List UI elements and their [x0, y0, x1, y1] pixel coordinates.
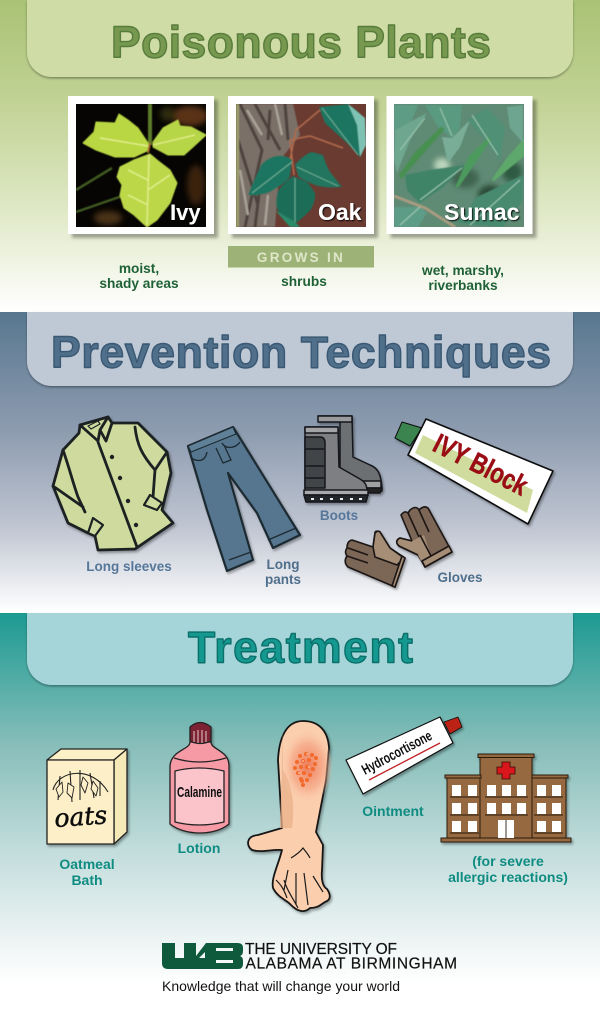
icon: hospital building	[441, 754, 571, 842]
text: IVY Block: IVY Block	[428, 428, 533, 502]
title: Prevention Techniques: Prevention Techniques	[51, 328, 551, 378]
icon: UAB letters	[162, 943, 243, 969]
text: oatmeal bath label: Oatmeal	[59, 856, 115, 872]
panel: poison oak photo	[228, 96, 374, 234]
icon: rubber boots	[304, 416, 382, 502]
icon: oats box	[47, 749, 127, 844]
banner: grows in	[228, 246, 374, 268]
label: Oak: Oak	[318, 199, 362, 225]
text: Hydrocortisone: Hydrocortisone	[359, 728, 435, 778]
text: gloves label: Gloves	[437, 570, 483, 585]
icon: hydrocortisone tube	[346, 717, 462, 794]
panel: poison ivy photo	[68, 96, 214, 234]
background: prevention section	[0, 312, 600, 612]
icon: gloves	[345, 507, 452, 587]
text: long sleeves label: Long sleeves	[86, 559, 172, 574]
icon: ivy block tube	[395, 419, 553, 524]
text: university name: ALABAMA AT BIRMINGHAM	[246, 956, 457, 972]
text: lotion label: Lotion	[178, 840, 220, 856]
title: Treatment: Treatment	[188, 624, 413, 672]
title: Poisonous Plants: Poisonous Plants	[111, 18, 491, 68]
panel: prevention heading	[27, 312, 573, 386]
text: Calamine: Calamine	[177, 784, 222, 800]
label: Ivy: Ivy	[170, 200, 201, 225]
text: ointment label: Ointment	[362, 803, 424, 819]
panel: treatment heading	[27, 613, 573, 685]
text: sumac habitat: wet, marshy,	[421, 263, 504, 278]
background: treatment section	[0, 613, 600, 985]
label: Sumac: Sumac	[444, 199, 520, 225]
text: university name: THE UNIVERSITY OF	[245, 941, 397, 958]
panel: poisonous plants heading	[27, 0, 573, 77]
text: boots label: Boots	[320, 508, 358, 523]
logo: UAB	[162, 941, 457, 994]
text: oatmeal bath label: Bath	[71, 872, 103, 888]
icon: long pants	[188, 427, 300, 571]
text: sumac habitat: riverbanks	[428, 278, 498, 293]
text: long pants label: Long	[266, 557, 300, 572]
text: severe allergic reactions label: allergic reactions)	[448, 869, 568, 885]
icon: arm with rash	[248, 721, 332, 911]
banner: grows in: GROWS IN	[257, 250, 345, 265]
text: severe allergic reactions label: (for severe	[472, 853, 544, 869]
text: oats: oats	[53, 800, 108, 833]
text: oak habitat: shrubs	[281, 274, 327, 289]
icon: calamine lotion bottle	[170, 722, 229, 833]
text: ivy habitat: moist,	[119, 261, 159, 276]
icon: long sleeve shirt	[53, 417, 173, 550]
text: ivy habitat: shady areas	[99, 276, 179, 291]
panel: poison sumac photo	[386, 96, 532, 234]
text: long pants label: pants	[265, 572, 301, 587]
background: poisonous plants section	[0, 0, 600, 312]
text: tagline: Knowledge that will change your world	[162, 978, 400, 994]
